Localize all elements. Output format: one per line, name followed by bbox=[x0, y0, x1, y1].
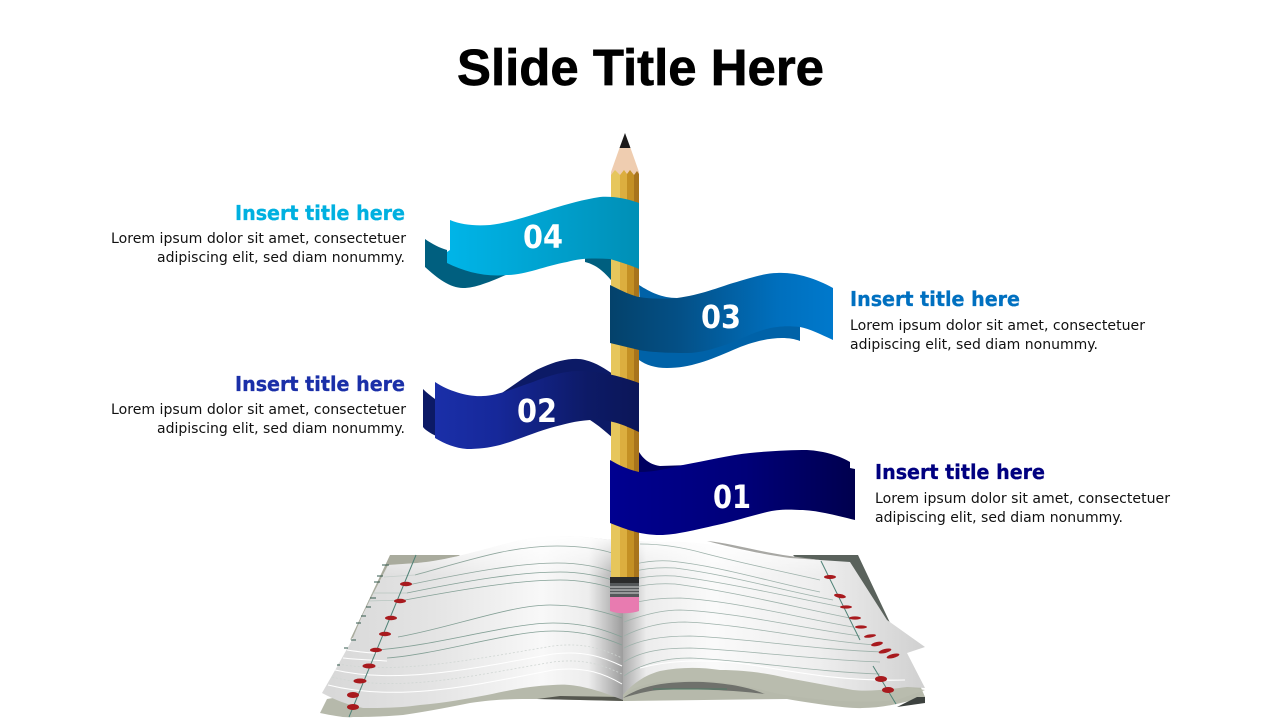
text block 04 bbox=[111, 201, 406, 266]
book cover and under pages bbox=[320, 555, 925, 717]
pencil lead bbox=[620, 133, 630, 148]
ribbon 04 bbox=[447, 197, 639, 275]
body 03: Lorem ipsum dolor sit amet, consectetuer bbox=[850, 318, 1145, 334]
heading 03: Insert title here bbox=[850, 287, 1020, 311]
left page red holes bbox=[347, 582, 412, 710]
body 04: adipiscing elit, sed diam nonummy. bbox=[157, 250, 405, 266]
open notebook bbox=[320, 536, 925, 717]
right page margin line bbox=[821, 561, 896, 704]
ribbon 01 band bbox=[610, 450, 855, 535]
ribbon 03 back bbox=[639, 285, 800, 368]
heading 02: Insert title here bbox=[235, 372, 405, 396]
ribbon 02 back bbox=[423, 359, 613, 438]
ribbon 01 back bbox=[639, 452, 690, 475]
heading 04: Insert title here bbox=[235, 201, 405, 225]
ribbon 03 bbox=[610, 273, 833, 353]
body 04: Lorem ipsum dolor sit amet, consectetuer bbox=[111, 231, 406, 247]
text block 03 bbox=[850, 287, 1145, 353]
ribbon 02 number: 02 bbox=[517, 392, 557, 430]
ribbon 01 number: 01 bbox=[713, 478, 751, 516]
body 01: Lorem ipsum dolor sit amet, consectetuer bbox=[875, 491, 1170, 507]
ribbon 03 number: 03 bbox=[701, 298, 741, 336]
body 02: adipiscing elit, sed diam nonummy. bbox=[157, 421, 405, 437]
ribbon 01 bbox=[610, 450, 855, 535]
left page margin line bbox=[349, 555, 416, 717]
title: Slide Title Here bbox=[457, 39, 824, 96]
ribbon backs behind pencil bbox=[423, 239, 800, 475]
right page red holes bbox=[824, 575, 900, 693]
text block 01 bbox=[875, 460, 1170, 526]
left page bbox=[322, 536, 623, 717]
ribbon 03 band bbox=[610, 273, 833, 353]
body 03: adipiscing elit, sed diam nonummy. bbox=[850, 337, 1098, 353]
ribbon 04 band bbox=[447, 197, 639, 275]
pencil eraser bbox=[610, 597, 639, 613]
ribbon 02 bbox=[435, 371, 639, 449]
pencil ferrule bbox=[610, 577, 639, 597]
right page ruled lines bbox=[624, 544, 905, 680]
ribbon 04 number: 04 bbox=[523, 218, 563, 256]
left page ruled lines bbox=[328, 546, 622, 692]
body 02: Lorem ipsum dolor sit amet, consectetuer bbox=[111, 402, 406, 418]
heading 01: Insert title here bbox=[875, 460, 1045, 484]
body 01: adipiscing elit, sed diam nonummy. bbox=[875, 510, 1123, 526]
right page bbox=[623, 541, 925, 704]
left page binding ticks bbox=[337, 565, 389, 665]
ribbon 02 band bbox=[435, 371, 639, 449]
text block 02 bbox=[111, 372, 406, 437]
pencil body bbox=[611, 170, 639, 580]
pencil wood tip bbox=[611, 148, 639, 178]
ribbon 04 back bbox=[425, 239, 611, 288]
pencil bbox=[610, 133, 639, 613]
